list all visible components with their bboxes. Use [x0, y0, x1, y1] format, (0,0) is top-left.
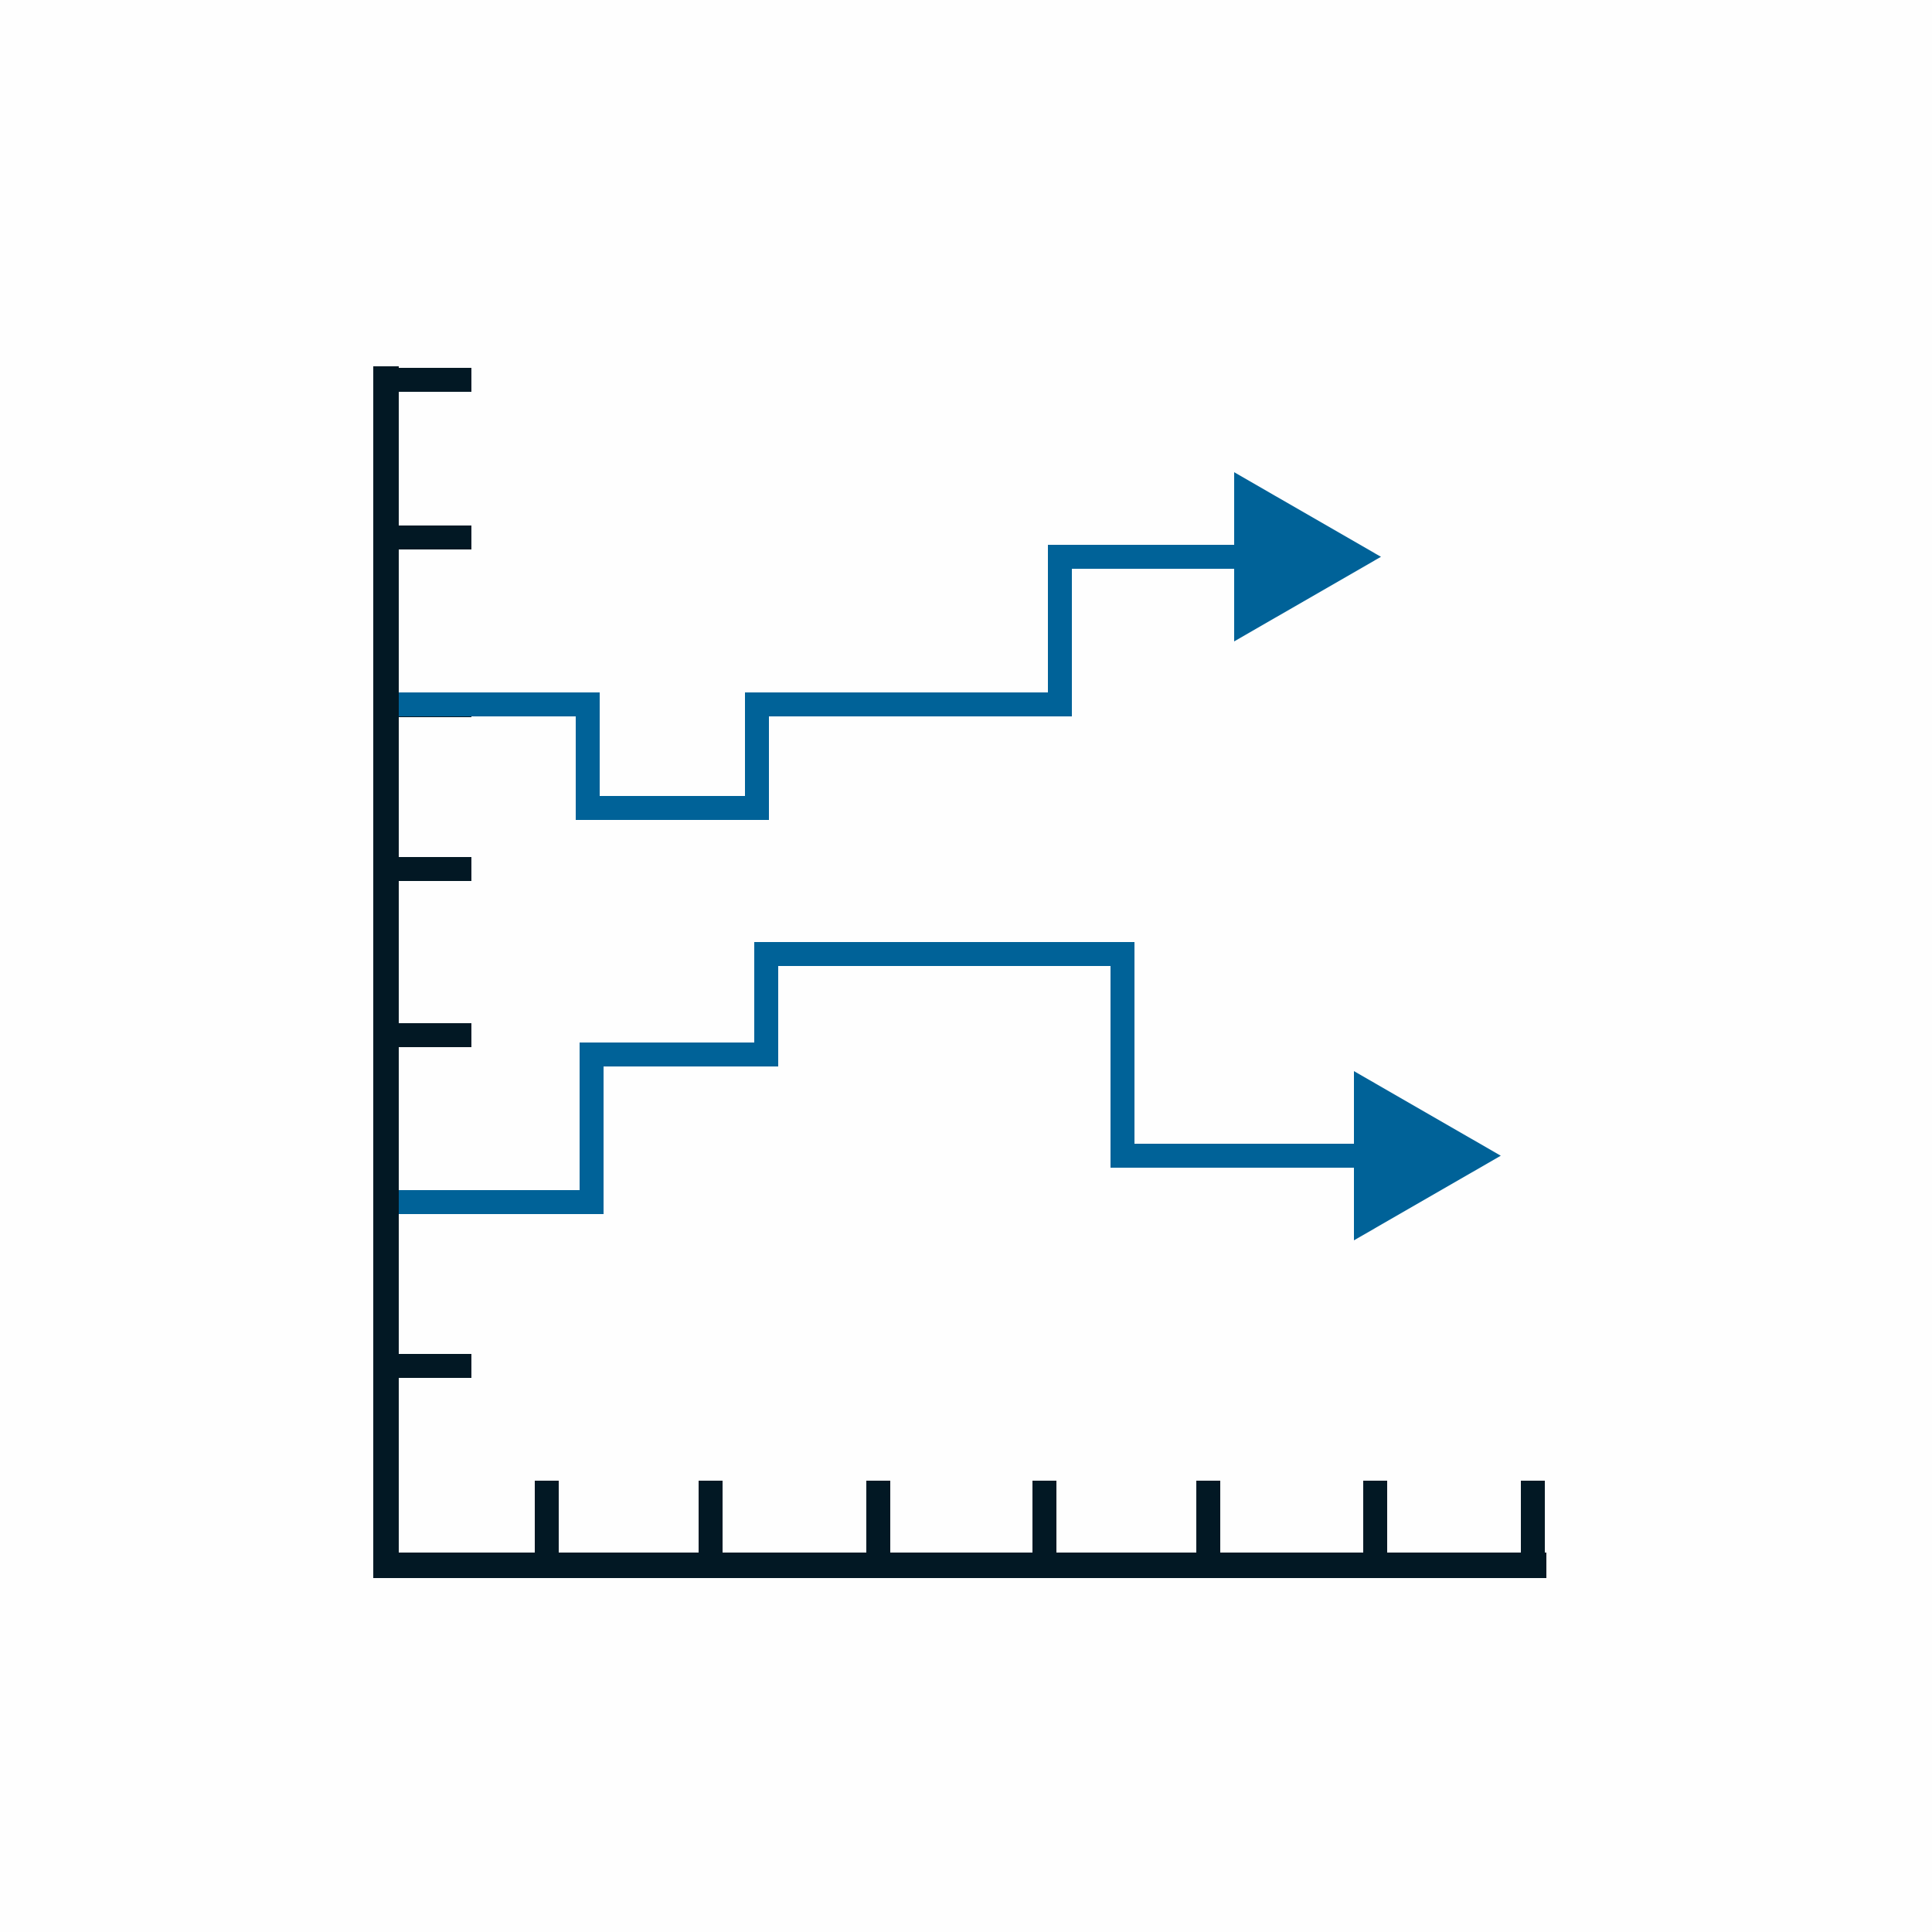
- x axis with tick marks: [373, 1481, 1546, 1578]
- lower step line with arrow: [399, 954, 1501, 1240]
- upper step line with arrow: [399, 472, 1381, 808]
- y axis with tick marks: [373, 366, 471, 1578]
